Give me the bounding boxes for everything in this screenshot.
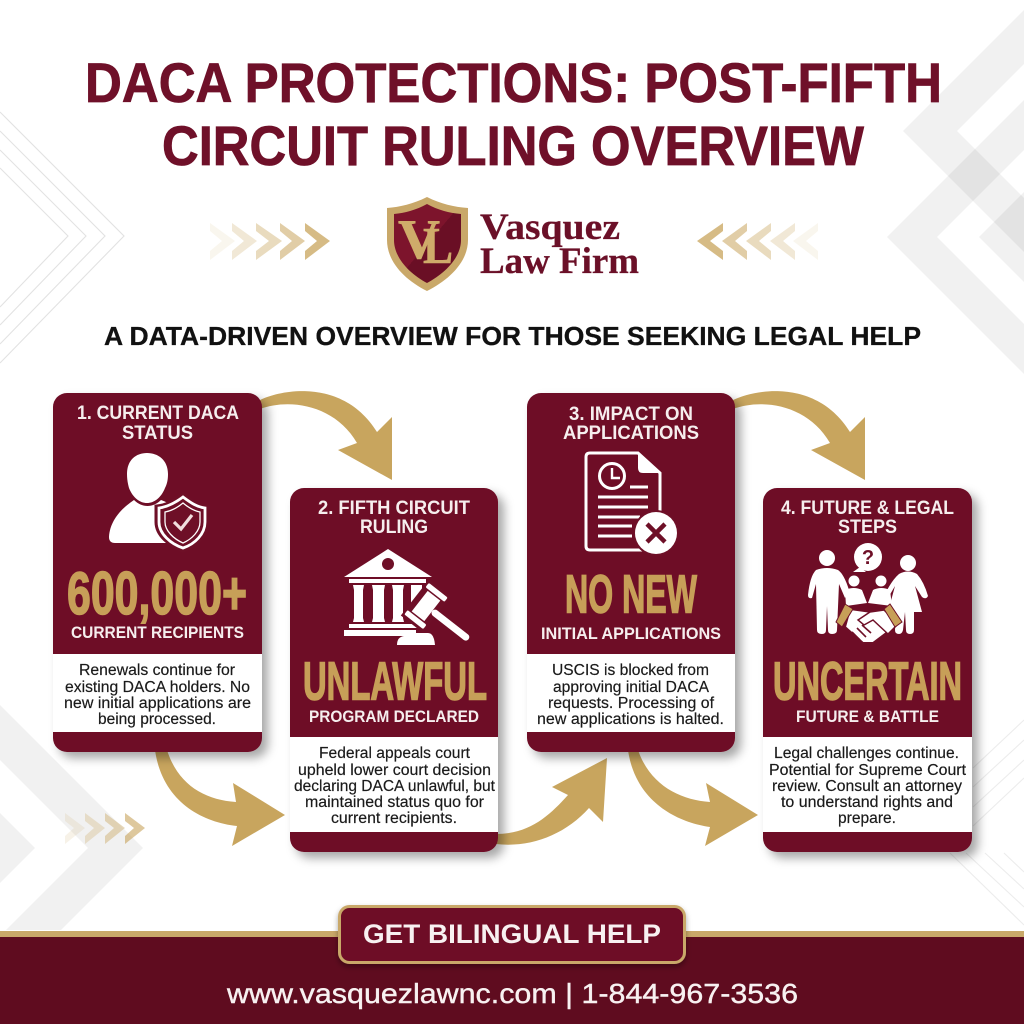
panel: 4 future and legal steps [763,488,972,852]
card 4 heading: STEPS [838,517,897,538]
footer contact line: www.vasquezlawnc.com | 1-844-967-3536 [226,978,798,1009]
arrow: step 3 to step 4 (top) [733,391,865,480]
card 2 description: current recipients. [331,810,457,827]
card 4 description: review. Consult an attorney [772,778,962,795]
panel: 3 impact on applications [527,393,735,752]
card 3 heading [563,404,699,444]
card 3 description: USCIS is blocked from [552,662,709,679]
decorative gold chevrons lower left [65,813,145,844]
stat: no new: NO NEW [565,564,697,624]
card 2 description: upheld lower court decision [298,762,491,779]
icon: VL shield: L [423,218,453,275]
card 2 description [294,745,496,827]
arrow: step 1 to step 2 (top) [260,391,392,480]
card 4 heading [781,498,954,538]
card 2 heading: 2. FIFTH CIRCUIT [318,498,470,519]
logo wordmark [480,207,639,282]
stat label: INITIAL APPLICATIONS [541,625,721,643]
arrow: step 1 to step 2 (bottom) [155,750,285,846]
card 1 description: new initial applications are [64,695,251,712]
arrow: step 2 to step 3 [496,758,607,845]
card 3 description: requests. Processing of [548,695,715,712]
title: CIRCUIT RULING OVERVIEW [162,114,864,177]
icon: courthouse and gavel [344,549,483,657]
decorative gold chevrons left [210,223,330,260]
card 4 description [769,745,967,827]
icon: document with clock and X [586,453,679,556]
card 3 heading: 3. IMPACT ON [569,404,693,425]
icon: VL shield: V [398,209,440,271]
panel: 1 current DACA status [53,393,262,752]
card 2 heading: RULING [360,517,428,538]
icon: VL shield [387,197,468,291]
stat label: FUTURE & BATTLE [796,708,939,726]
stat: unlawful: UNLAWFUL [303,652,487,712]
card 1 description [64,662,251,728]
card 2 heading [318,498,470,538]
panel: 2 Fifth Circuit ruling [290,488,498,852]
card 1 description: existing DACA holders. No [65,679,250,696]
card 2 description: Federal appeals court [319,745,471,762]
card 3 description: new applications is halted. [537,711,724,728]
card 2 description: maintained status quo for [305,794,484,811]
subtitle: A DATA-DRIVEN OVERVIEW FOR THOSE SEEKING LEGAL HELP [104,323,921,351]
card 4 description: to understand rights and [781,794,953,811]
card 1 heading [77,403,239,444]
icon: family with question and handshake [808,543,928,643]
card 3 heading: APPLICATIONS [563,423,699,444]
card 1 heading: 1. CURRENT DACA [77,403,239,424]
logo: Vasquez Law Firm [387,197,639,291]
stat: 600,000+: 600,000+ [67,560,247,627]
card 4 description: prepare. [838,810,896,827]
call-to-action button: GET BILINGUAL HELP [363,919,661,949]
logo wordmark: Vasquez [480,207,620,248]
icon: person with shield [109,453,207,550]
card 1 heading: STATUS [122,423,193,444]
stat label: PROGRAM DECLARED [309,708,479,726]
title: DACA PROTECTIONS: POST-FIFTH [85,51,942,114]
arrow: step 3 to step 4 (bottom) [628,750,758,846]
title [85,51,942,177]
card 1 description: Renewals continue for [79,662,235,679]
icon: family with question and handshake: ? [862,547,874,569]
call-to-action button [340,906,684,962]
card 4 description: Potential for Supreme Court [769,762,967,779]
card 4 heading: 4. FUTURE & LEGAL [781,498,954,519]
card 1 description: being processed. [98,711,216,728]
stat label: CURRENT RECIPIENTS [71,624,244,642]
card 4 description: Legal challenges continue. [774,745,959,762]
card 3 description: approving initial DACA [553,679,710,696]
card 2 description: declaring DACA unlawful, but [294,778,496,795]
decorative gold chevrons right [697,223,818,260]
logo wordmark: Law Firm [480,241,639,282]
card 3 description [537,662,724,728]
footer band [0,931,1024,1024]
